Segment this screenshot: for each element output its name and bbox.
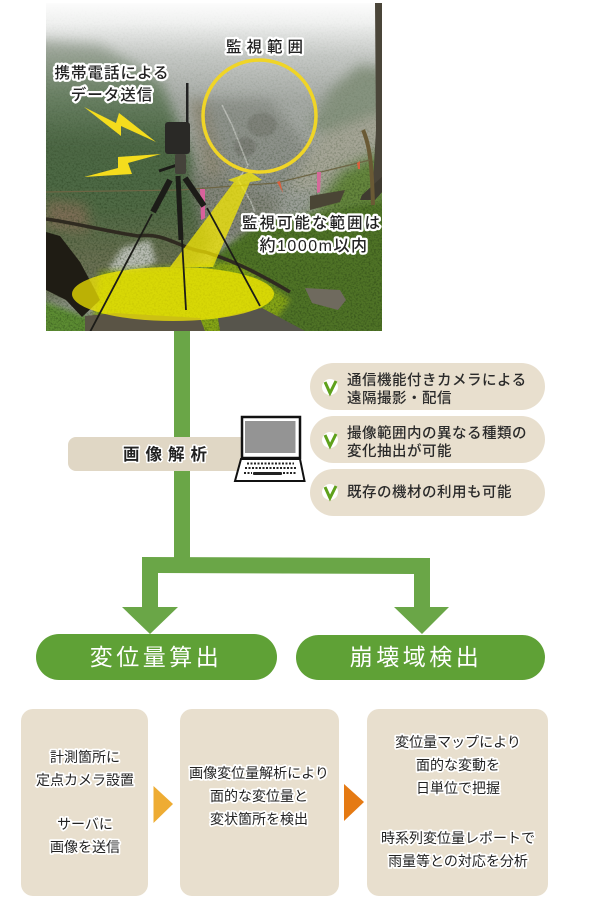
pill: displacement calculation — [36, 634, 277, 680]
feature: existing equipment — [310, 469, 545, 516]
label: image analysis — [68, 437, 248, 471]
feature: remote capture — [310, 363, 545, 410]
card: displacement map and report: 雨量等との対応を分析 — [388, 853, 528, 869]
card: camera setup: 画像を送信 — [50, 839, 120, 855]
feature: change extraction: 変化抽出が可能 — [347, 442, 452, 460]
icon: check — [322, 484, 338, 500]
icon: check — [322, 432, 338, 448]
card: displacement map and report: 面的な変動を — [416, 757, 500, 773]
yellow range ellipse and arrow — [72, 172, 274, 321]
card: image displacement analysis: 面的な変位量と — [210, 788, 308, 804]
pill: displacement calculation: 変位量算出 — [90, 644, 222, 670]
monitoring camera — [165, 83, 190, 154]
monitoring range circle — [203, 60, 316, 172]
flow line: trunk and branches — [122, 331, 449, 634]
card: displacement map and report: 時系列変位量レポートで — [381, 830, 535, 846]
card: image displacement analysis: 変状箇所を検出 — [210, 811, 308, 827]
label: data transmission second line: データ送信 — [71, 85, 153, 104]
card: camera setup: 定点カメラ設置 — [36, 772, 134, 788]
icon: lightning bolt upper — [84, 107, 156, 142]
pill: collapse area detection: 崩壊域検出 — [350, 644, 482, 670]
pill: collapse area detection — [296, 635, 545, 680]
arrow: right down — [394, 607, 449, 634]
card: image displacement analysis: 画像変位量解析により — [189, 765, 329, 781]
feature: remote capture: 通信機能付きカメラによる — [347, 372, 527, 389]
panel: monitoring site photo — [30, 3, 392, 340]
label: image analysis: 画像解析 — [123, 444, 213, 464]
card: camera setup — [21, 709, 148, 896]
feature: change extraction: 撮像範囲内の異なる種類の — [347, 424, 527, 442]
label: mobile data transmission: 携帯電話による — [54, 64, 170, 82]
icon: lightning bolt lower — [84, 154, 161, 177]
arrow: left down — [122, 607, 178, 634]
card: displacement map and report — [367, 709, 548, 896]
feature: change extraction — [310, 416, 545, 463]
tree trunks and branches — [46, 219, 290, 292]
label: monitoring range: 監視範囲 — [226, 38, 308, 56]
icon: laptop — [235, 417, 304, 481]
rocks in valley — [234, 113, 277, 157]
label: within 1000m: 約1000m以内 — [260, 237, 368, 255]
rope and ribbons — [46, 160, 370, 192]
card: camera setup: サーバに — [57, 816, 113, 832]
foliage texture — [46, 3, 382, 331]
label: monitorable range: 監視可能な範囲は — [242, 214, 382, 232]
card: image displacement analysis — [180, 709, 339, 896]
feature: remote capture: 遠隔撮影・配信 — [347, 389, 452, 407]
card: displacement map and report: 変位量マップにより — [395, 734, 521, 750]
tripod — [90, 164, 260, 332]
card: displacement map and report: 日単位で把握 — [416, 780, 500, 796]
card: camera setup: 計測箇所に — [50, 749, 120, 765]
arrow: orange — [344, 784, 364, 821]
icon: check — [322, 379, 338, 395]
arrow: orange-yellow — [154, 786, 173, 823]
feature: existing equipment: 既存の機材の利用も可能 — [347, 484, 512, 501]
